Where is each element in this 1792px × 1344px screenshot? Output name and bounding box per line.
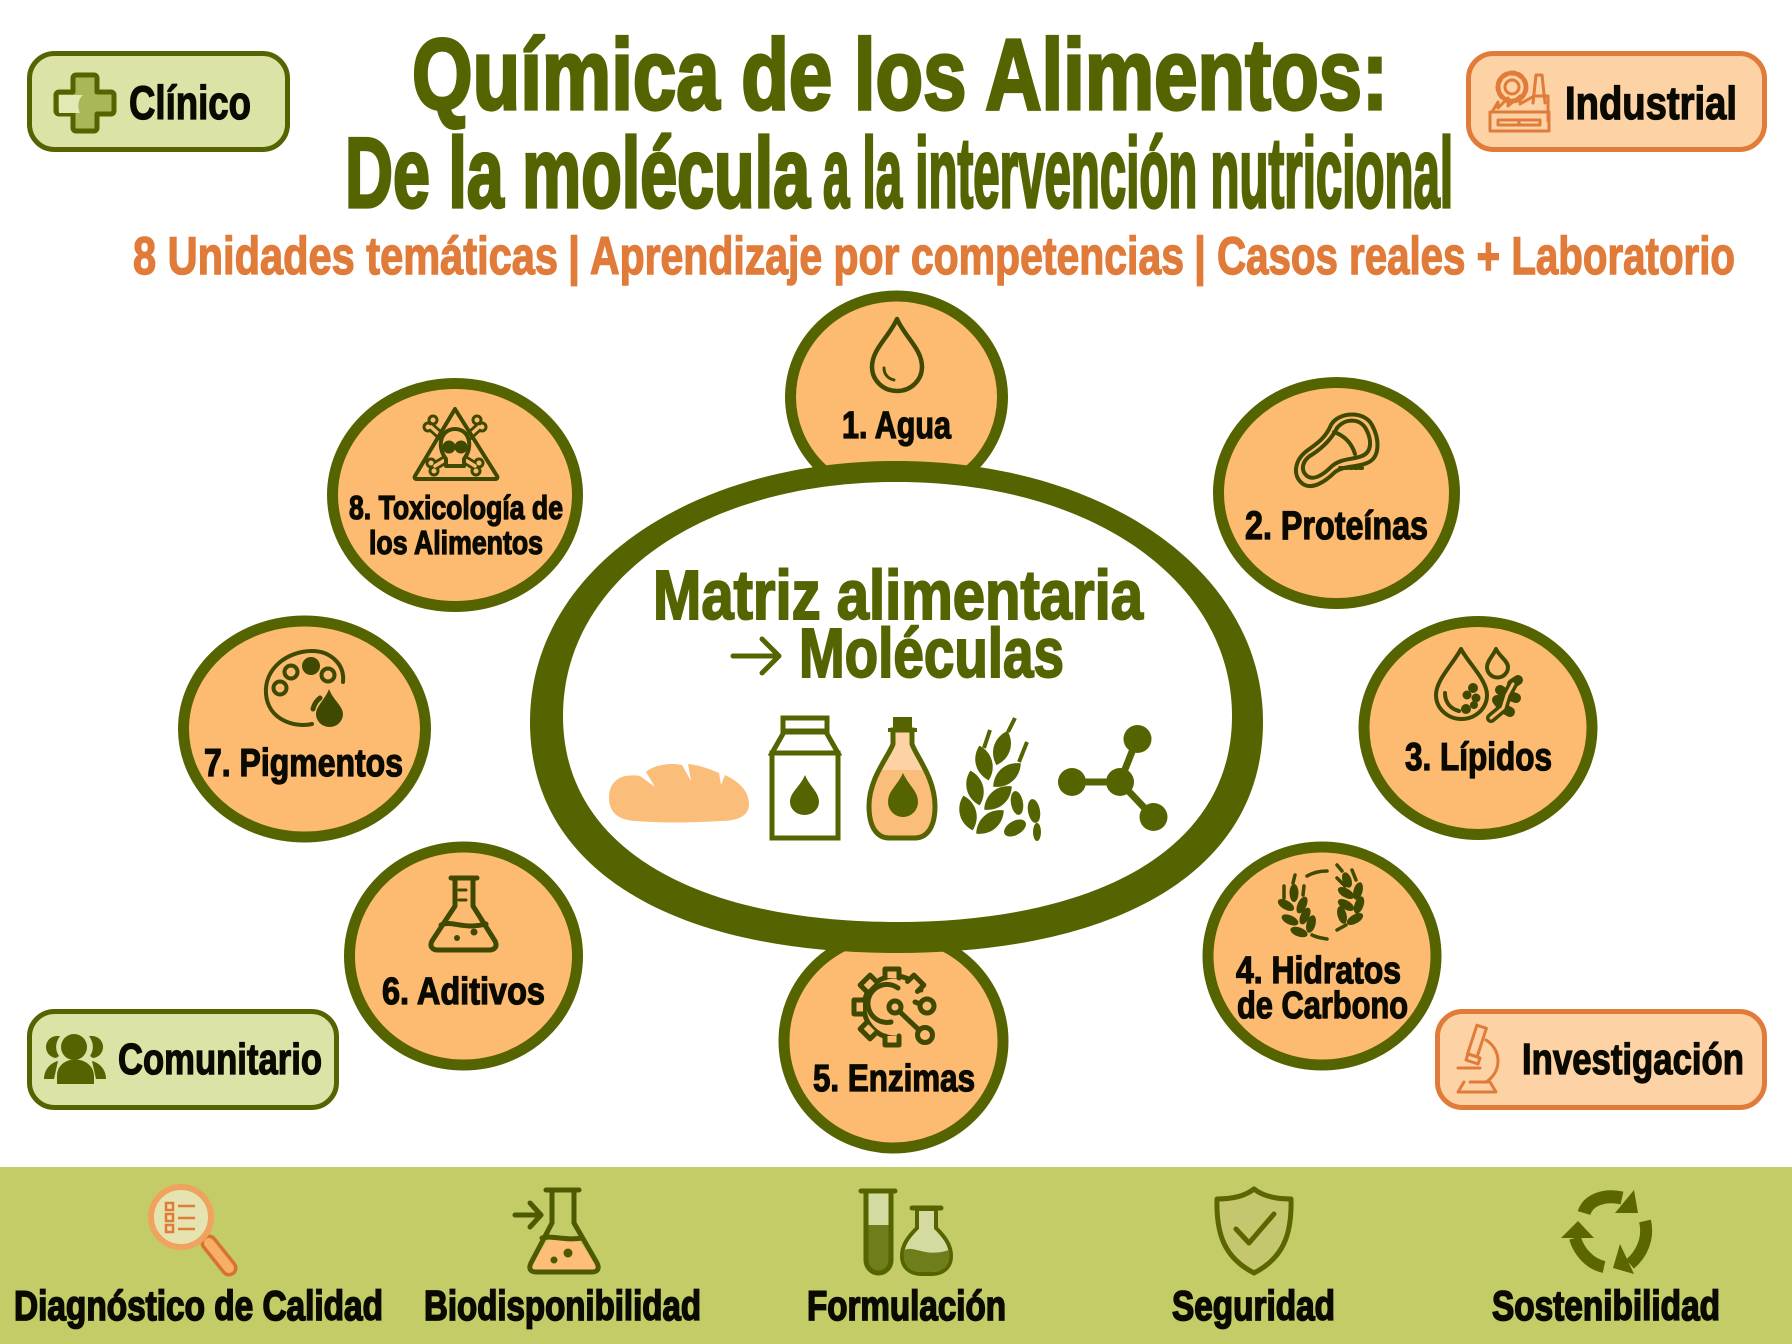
icon: milk carton — [772, 718, 838, 838]
item: Sostenibilidad — [1492, 1190, 1720, 1329]
icon: people — [44, 1034, 106, 1084]
item: Sostenibilidad: Sostenibilidad — [1492, 1282, 1720, 1329]
icon: flask — [431, 878, 496, 950]
arrow — [733, 639, 779, 673]
unit 3: Lípidos: 3. Lípidos — [1405, 736, 1552, 779]
icon: protein — [1296, 414, 1377, 486]
unit 2: Proteínas — [1218, 382, 1454, 604]
icon: lipid drops — [1436, 649, 1518, 719]
icon: medical cross — [56, 75, 114, 131]
item: Diagnóstico de Calidad — [14, 1187, 383, 1329]
unit 4: Hidratos de Carbono: de Carbono — [1237, 985, 1408, 1027]
icon: oil bottle — [869, 717, 935, 838]
subtitle: | — [568, 227, 580, 287]
item: Diagnóstico de Calidad: Diagnóstico de Calidad — [14, 1282, 383, 1329]
badge: Comunitario — [30, 1012, 336, 1108]
badge: Industrial — [1468, 54, 1764, 150]
badge: Industrial: Industrial — [1565, 77, 1737, 129]
icon: flask with arrow — [515, 1190, 598, 1272]
item: Seguridad — [1172, 1189, 1335, 1329]
unit 6: Aditivos: 6. Aditivos — [382, 971, 545, 1013]
badge: Investigación — [1438, 1012, 1764, 1108]
central heading: Matriz alimentaria — [653, 556, 1144, 634]
central oval: food matrix — [530, 461, 1263, 953]
item: Formulación: Formulación — [807, 1282, 1006, 1329]
title — [345, 19, 1453, 228]
item: Biodisponibilidad: Biodisponibilidad — [424, 1282, 701, 1329]
icon: test tube and round flask — [861, 1191, 951, 1274]
icon: recycle arrows — [1561, 1190, 1646, 1274]
icon: toxic warning — [415, 409, 497, 479]
unit 2: Proteínas: 2. Proteínas — [1245, 504, 1428, 548]
item: Formulación — [807, 1191, 1006, 1329]
subtitle: 8 Unidades temáticas — [133, 227, 558, 286]
subtitle: Aprendizaje por competencias — [590, 227, 1184, 286]
unit 3: Lípidos — [1364, 622, 1592, 834]
unit 1: Agua — [790, 296, 1002, 498]
unit 8: Toxicología de los Alimentos — [332, 384, 578, 606]
unit 7: Pigmentos: 7. Pigmentos — [204, 742, 403, 785]
icon: molecule — [1058, 725, 1168, 831]
icon: water drop — [872, 319, 922, 391]
central heading: Moléculas — [799, 614, 1064, 692]
icon: microscope — [1458, 1025, 1498, 1092]
subtitle — [133, 227, 1735, 287]
unit 8: Toxicología de los Alimentos: los Alimentos — [369, 524, 543, 561]
title: Química de los Alimentos: — [412, 19, 1388, 131]
unit 4: Hidratos de Carbono — [1208, 847, 1436, 1065]
unit 5: Enzimas — [784, 934, 1003, 1148]
subtitle: | — [1194, 227, 1206, 287]
icon: wheat — [955, 718, 1042, 841]
icon: factory and gear — [1490, 73, 1549, 131]
icon: bread — [609, 764, 749, 822]
badge: Comunitario: Comunitario — [118, 1035, 322, 1084]
bottom band — [0, 1167, 1792, 1344]
unit 4: Hidratos de Carbono: 4. Hidratos — [1236, 950, 1401, 992]
unit 8: Toxicología de los Alimentos: 8. Toxicología de — [349, 489, 563, 526]
unit 7: Pigmentos — [184, 621, 426, 837]
unit 1: Agua: 1. Agua — [842, 405, 952, 447]
title: De la molécula — [345, 117, 811, 228]
badge: Clínico — [30, 54, 288, 150]
icon: palette — [266, 651, 343, 727]
item: Seguridad: Seguridad — [1172, 1282, 1335, 1329]
unit 6: Aditivos — [350, 847, 578, 1065]
icon: magnifier checklist — [151, 1187, 229, 1268]
icon: shield check — [1217, 1189, 1291, 1273]
icon: enzyme gear — [854, 969, 934, 1045]
item: Biodisponibilidad — [424, 1190, 701, 1329]
central heading — [653, 556, 1144, 692]
icon: wheat wreath — [1276, 865, 1366, 939]
badge: Clínico: Clínico — [129, 76, 251, 129]
unit 5: Enzimas: 5. Enzimas — [813, 1058, 975, 1100]
